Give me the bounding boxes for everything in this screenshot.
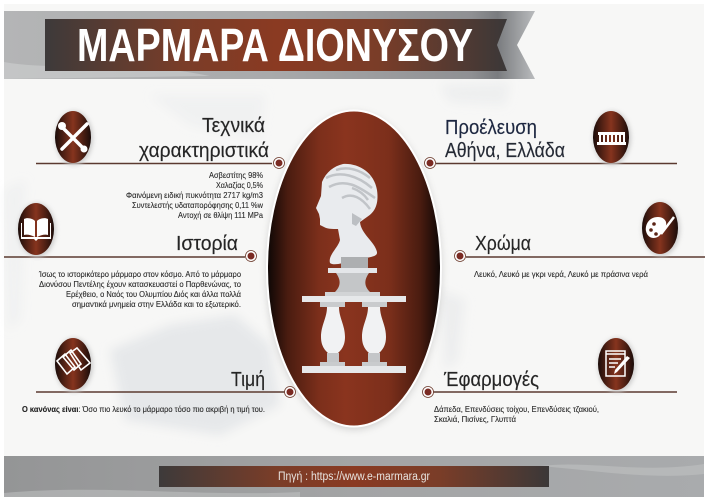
- text block: technical data: Συντελεστής υδαταπορόφησης 0,11 %w: [132, 200, 264, 210]
- text block: price: Ο κανόνας είναι: Όσο πιο λευκό το μάρμαρο τόσο πιο ακριβή η τιμή του.: [22, 404, 265, 414]
- text block: history: Διονύσου Πεντέλης έχουν κατασκευαστεί ο Παρθενώνας, το: [39, 279, 241, 289]
- icon: book: [18, 203, 56, 257]
- text block: technical data: Αντοχή σε θλίψη 111 MPa: [178, 210, 263, 220]
- heading: origin: Αθήνα, Ελλάδα: [445, 139, 565, 162]
- icon: notepad: [598, 338, 636, 392]
- heading: price: Τιμή: [231, 368, 265, 391]
- icon: temple: [593, 111, 631, 165]
- text block: technical data: Ασβεστίτης 98%: [209, 170, 263, 180]
- connector dots: [246, 158, 466, 398]
- connector lines: [4, 164, 705, 392]
- text block: colour: Λευκό, Λευκό με γκρι νερά, Λευκό με πράσινα νερά: [474, 269, 648, 279]
- heading: origin: [445, 116, 565, 162]
- text block: technical data: [126, 170, 264, 220]
- text block: technical data: Φαινόμενη ειδική πυκνότητα 2717 kg/m3: [126, 190, 263, 200]
- text block: history: Ίσως το ιστορικότερο μάρμαρο στον κόσμο. Από το μάρμαρο: [38, 269, 241, 279]
- title ribbon: [4, 11, 535, 79]
- heading: technical characteristics: χαρακτηριστικά: [139, 139, 269, 162]
- heading: origin: Προέλευση: [445, 116, 537, 139]
- heading: applications: Έφαρμογές: [443, 368, 539, 391]
- text block: history: [38, 269, 241, 309]
- heading: history: Ιστορία: [176, 232, 238, 255]
- text block: history: σημαντικά μνημεία στην Ελλάδα και το εξωτερικό.: [72, 299, 241, 309]
- central oval panel: [267, 110, 441, 429]
- icon: palette: [642, 202, 680, 256]
- heading: technical characteristics: [139, 114, 269, 162]
- text block: applications: Δάπεδα, Επενδύσεις τοίχου, Επενδύσεις τζακιού,: [434, 404, 599, 414]
- text block: history: Ερέχθειο, ο Ναός του Ολυμπίου Διός και άλλα πολλά: [66, 289, 241, 299]
- text block: technical data: Χαλαζίας 0,5%: [216, 180, 263, 190]
- heading: technical characteristics: Τεχνικά: [202, 114, 265, 137]
- marble bust on balustrade: [302, 164, 406, 373]
- title bar: ΜΑΡΜΑΡΑ ΔΙΟΝΥΣΟΥ: [77, 19, 473, 71]
- icon: tools: [55, 111, 93, 165]
- source bar: [159, 466, 549, 487]
- icon: money: [55, 338, 93, 392]
- text block: applications: Σκαλιά, Πισίνες, Γλυπτά: [434, 414, 516, 424]
- text block: applications: [434, 404, 599, 424]
- source bar: Πηγή : https://www.e-marmara.gr: [278, 471, 430, 483]
- heading: colour: Χρώμα: [475, 232, 531, 255]
- footer band: [4, 456, 704, 497]
